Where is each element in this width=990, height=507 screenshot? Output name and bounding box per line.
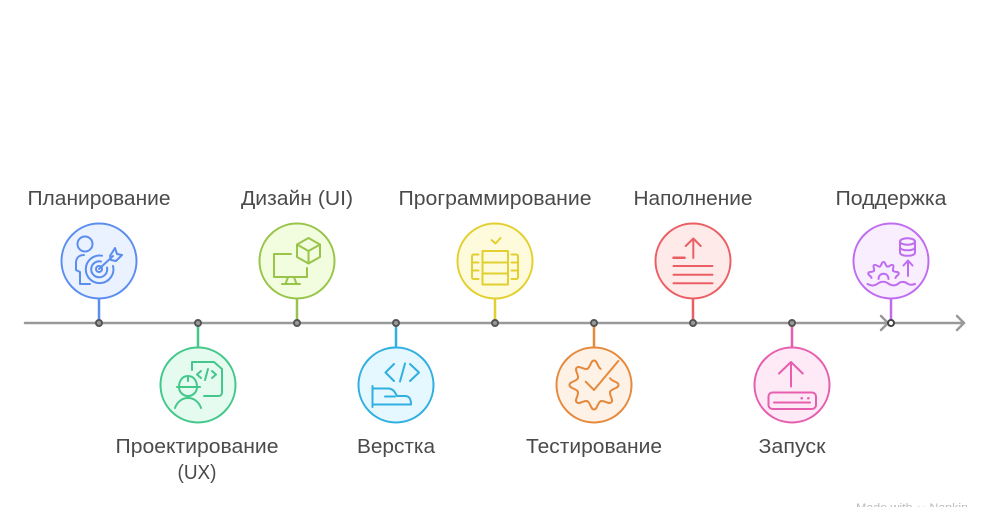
icon: hand with code: [372, 364, 419, 407]
circle: [160, 348, 236, 422]
connector: [296, 298, 298, 323]
icon: upload content lines: [674, 238, 712, 283]
circle: [358, 348, 434, 422]
heading: Наполнение: Наполнение: [634, 188, 752, 210]
step: Тестирование: [526, 320, 662, 458]
step: Программирование: [398, 188, 592, 326]
step: Проектирование (UX): (UX): [178, 462, 216, 484]
connector: [395, 323, 397, 348]
heading: Дизайн (UI): Дизайн (UI): [241, 188, 353, 210]
heading: Верстка: Верстка: [357, 436, 436, 458]
step: Запуск: [754, 320, 830, 458]
connector: [197, 323, 199, 348]
timeline node: [492, 320, 498, 326]
step: Наполнение: [634, 188, 752, 326]
timeline node: [96, 320, 102, 326]
connector: [692, 298, 694, 323]
circle: [62, 224, 136, 298]
connector: [494, 298, 496, 323]
step: Верстка: [357, 320, 436, 458]
step: Дизайн (UI): [241, 188, 353, 326]
icon: engineer with code document: [175, 362, 222, 408]
circle: [556, 348, 632, 422]
timeline node: [294, 320, 300, 326]
timeline node: [393, 320, 399, 326]
circle: [656, 224, 730, 298]
step: Планирование: [28, 188, 171, 326]
circle: [854, 224, 928, 298]
circle: [260, 224, 334, 298]
icon: person with target: [76, 236, 122, 284]
circle: [458, 224, 532, 298]
arrow: timeline axis: [25, 316, 964, 330]
connector: [98, 298, 100, 323]
timeline node: [591, 320, 597, 326]
heading: Запуск: Запуск: [758, 436, 826, 458]
timeline node: [888, 320, 894, 326]
circle: [754, 348, 830, 422]
heading: Проектирование (UX): Проектирование: [116, 436, 278, 458]
connector: [890, 298, 892, 323]
heading: Тестирование: Тестирование: [526, 436, 662, 458]
icon: gear with checkmark: [570, 360, 618, 410]
heading: Поддержка: Поддержка: [836, 188, 947, 210]
timeline node: [789, 320, 795, 326]
icon: monitor and cube: [274, 238, 320, 284]
icon: data table with checkmark: [472, 238, 518, 284]
timeline node: [690, 320, 696, 326]
icon: server with upload arrow: [768, 362, 816, 409]
step: Проектирование (UX): [116, 320, 278, 484]
connector: [791, 323, 793, 348]
heading: Планирование: Планирование: [28, 188, 171, 210]
connector: [593, 323, 595, 348]
step: Поддержка: [836, 188, 947, 326]
heading: Программирование: Программирование: [398, 188, 592, 210]
icon: gear, database and waves: [867, 238, 915, 285]
timeline node: [195, 320, 201, 326]
